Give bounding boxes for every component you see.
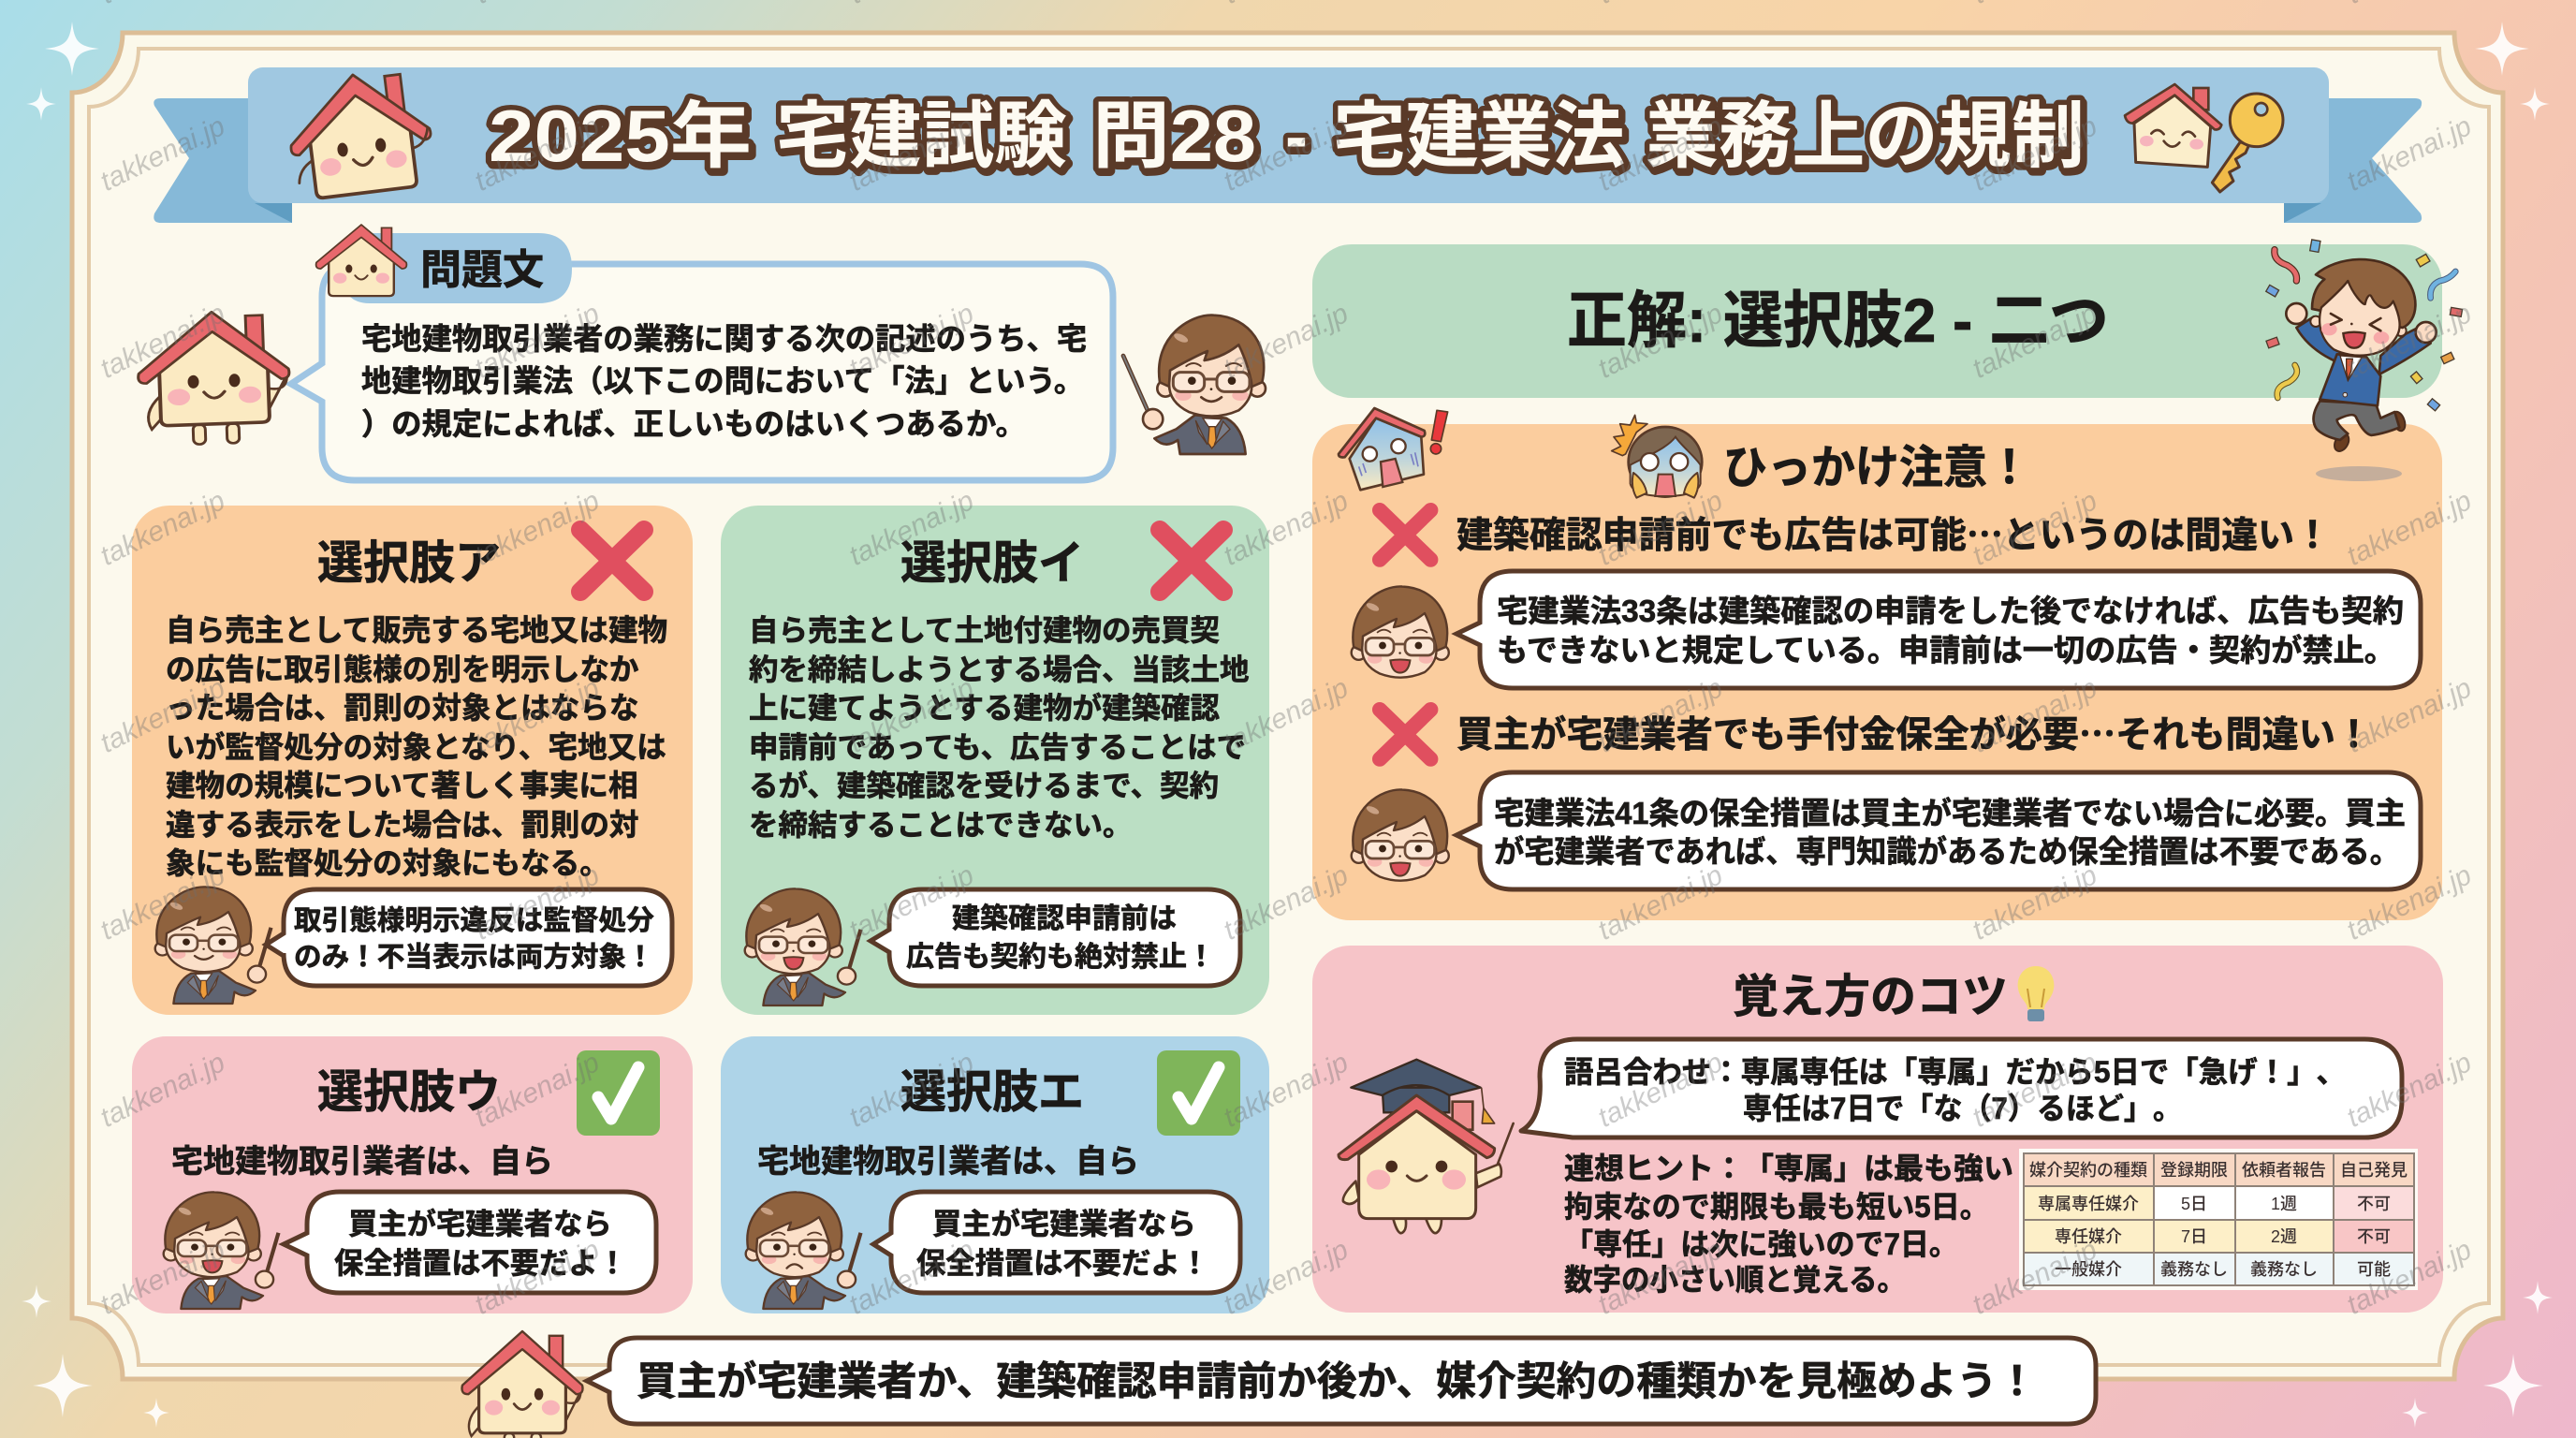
comparison table: 依頼者報告: [2242, 1161, 2326, 1180]
icon: house mascot: [136, 309, 291, 447]
comparison table: 可能: [2357, 1260, 2391, 1279]
icon: teacher: [746, 1192, 861, 1309]
bubble text: [906, 903, 1215, 973]
body text: 自ら売主として販売する宅地又は建物: [166, 613, 667, 647]
comparison table: 5日: [2181, 1195, 2207, 1213]
icon: scared house: [1339, 408, 1448, 490]
bubble text: 建築確認申請前は: [952, 903, 1177, 934]
watermarks: takkenai.jp: [95, 298, 230, 385]
body text: 象にも監督処分の対象にもなる。: [166, 846, 609, 880]
watermarks: takkenai.jp: [470, 298, 605, 385]
watermarks: takkenai.jp: [470, 1047, 605, 1134]
comparison table: 7日: [2181, 1227, 2207, 1246]
watermarks: takkenai.jp: [1219, 859, 1354, 946]
watermarks: takkenai.jp: [844, 1234, 979, 1321]
watermarks: takkenai.jp: [2342, 1047, 2477, 1134]
heading: 選択肢ウ: [317, 1067, 501, 1118]
watermarks: takkenai.jp: [470, 859, 605, 946]
icon: check: [577, 1050, 660, 1136]
comparison table: 登録期限: [2160, 1161, 2228, 1180]
watermarks: takkenai.jp: [1593, 298, 1728, 385]
ribbon tail: left: [154, 98, 292, 223]
tab: [341, 233, 572, 303]
watermarks: takkenai.jp: [470, 672, 605, 759]
body text: 自ら売主として土地付建物の売買契: [749, 613, 1220, 647]
comparison table: 一般媒介: [2055, 1260, 2122, 1279]
callout text: 買主が宅建業者か、建築確認申請前か後か、媒介契約の種類かを見極めよう！: [637, 1359, 2037, 1404]
comparison table: 媒介契約の種類: [2029, 1161, 2147, 1180]
bottom callout: [461, 1331, 2096, 1438]
body text: を締結することはできない。: [749, 808, 1133, 842]
icon: teacher face: [1352, 586, 1449, 678]
watermarks: takkenai.jp: [1219, 1234, 1354, 1321]
question text: 宅地建物取引業者の業務に関する次の記述のうち、宅: [361, 322, 1087, 356]
watermarks: takkenai.jp: [95, 672, 230, 759]
trap heading: 買主が宅建業者でも手付金保全が必要…それも間違い！: [1456, 706, 2372, 758]
body text: るが、建築確認を受けるまで、契約: [749, 769, 1219, 802]
icon: key: [2212, 94, 2283, 192]
comparison table: 義務なし: [2250, 1260, 2318, 1279]
body text: 申請前であっても、広告することはで: [749, 730, 1246, 764]
watermarks: takkenai.jp: [1593, 1047, 1728, 1134]
bubble text: 宅建業法41条の保全措置は買主が宅建業者でない場合に必要。買主: [1494, 796, 2406, 830]
body text: の広告に取引態様の別を明示しなか: [166, 653, 639, 686]
watermarks: takkenai.jp: [1968, 298, 2102, 385]
bubble text: [294, 905, 654, 973]
trap 2: [1352, 706, 2421, 889]
bubble text: 買主が宅建業者なら: [932, 1207, 1196, 1240]
comparison table: 義務なし: [2160, 1260, 2228, 1279]
panel: memorization tips: [1312, 946, 2443, 1313]
panel: option E: [721, 1036, 1269, 1313]
speech bubble: [873, 1192, 1240, 1293]
heading: 選択肢ア: [317, 538, 501, 589]
comparison table: 専任媒介: [2055, 1227, 2122, 1246]
speech bubble: [1456, 571, 2421, 688]
heading: title: 宅建試験: [776, 95, 1067, 177]
bubble text: が宅建業者であれば、専門知識があるため保全措置は不要である。: [1494, 834, 2400, 869]
bubble text: 広告も契約も絶対禁止！: [906, 942, 1215, 973]
icon: house with graduation cap: [1339, 1060, 1514, 1233]
icon: house mascot: [461, 1331, 583, 1438]
watermarks: takkenai.jp: [1968, 859, 2102, 946]
hint text: 「専任」は次に強いので7日。: [1564, 1227, 1958, 1261]
heading: title: 宅建業法: [1333, 95, 1625, 177]
bubble text: [1564, 1055, 2346, 1125]
comparison table: [2019, 1149, 2418, 1290]
watermarks: takkenai.jp: [844, 485, 979, 572]
icon: teacher: [164, 1192, 279, 1309]
speech bubble: [871, 889, 1240, 986]
icon: small house: [316, 225, 406, 296]
heading: title: 業務上の規制: [1646, 95, 2085, 177]
watermarks: takkenai.jp: [2342, 672, 2477, 759]
body text: 上に建てようとする建物が建築確認: [749, 691, 1221, 725]
watermarks: takkenai.jp: [844, 298, 979, 385]
panel: trap warning: [1312, 408, 2442, 920]
panel: option A: [132, 506, 693, 1015]
icon: cross: [580, 530, 644, 592]
speech bubble: [284, 1192, 656, 1293]
watermarks: takkenai.jp: [95, 110, 230, 198]
watermarks: takkenai.jp: [2342, 298, 2477, 385]
bubble text: 保全措置は不要だよ！: [334, 1247, 627, 1280]
watermarks: takkenai.jp: [1968, 485, 2102, 572]
watermarks: takkenai.jp: [2342, 485, 2477, 572]
watermarks: takkenai.jp: [844, 1047, 979, 1134]
watermarks: takkenai.jp: [95, 485, 230, 572]
icon: light bulb: [2018, 966, 2054, 1021]
bubble text: 買主が宅建業者なら: [348, 1207, 612, 1240]
panel: option I: [721, 506, 1269, 1015]
icon: house with happy eyes: [2125, 84, 2221, 167]
bubble text: 語呂合わせ：専属専任は「専属」だから5日で「急げ！」、: [1564, 1055, 2346, 1089]
answer text: 正解: 選択肢2 - 二つ: [1567, 286, 2109, 355]
watermarks: takkenai.jp: [844, 859, 979, 946]
icon: jumping boy with confetti: [2266, 240, 2463, 481]
watermarks: takkenai.jp: [470, 485, 605, 572]
body text: 約を締結しようとする場合、当該土地: [749, 653, 1250, 686]
bubble text: 宅建業法33条は建築確認の申請をした後でなければ、広告も契約: [1497, 594, 2404, 628]
body text: [166, 613, 667, 880]
icon: check: [1157, 1050, 1240, 1136]
icon: house mascot: [283, 66, 437, 201]
watermarks: takkenai.jp: [1593, 110, 1728, 198]
hint text: 拘束なので期限も最も短い5日。: [1564, 1190, 1989, 1224]
title banner: [154, 66, 2422, 223]
speech bubble: [291, 264, 1113, 480]
body text: った場合は、罰則の対象とはならな: [166, 691, 639, 725]
speech bubble: [266, 889, 672, 986]
icon: cross: [1380, 710, 1430, 759]
watermarks: takkenai.jp: [1593, 859, 1728, 946]
bubble text: [1497, 594, 2404, 668]
watermarks: takkenai.jp: [1219, 298, 1354, 385]
banner body: [248, 67, 2329, 203]
watermarks: takkenai.jp: [2342, 110, 2477, 198]
ribbon tail: right: [2284, 98, 2422, 223]
bubble text: 専任は7日で「な（7）るほど」。: [1743, 1092, 2182, 1125]
watermarks: takkenai.jp: [1219, 672, 1354, 759]
watermarks: takkenai.jp: [470, 1234, 605, 1321]
comparison table: 専属専任媒介: [2038, 1195, 2139, 1213]
heading: 選択肢イ: [900, 538, 1084, 589]
trap heading: 建築確認申請前でも広告は可能…というのは間違い！: [1456, 506, 2331, 559]
body text: [749, 613, 1250, 842]
icon: teacher: [1123, 315, 1266, 454]
hint text: 連想ヒント：「専属」は最も強い: [1564, 1152, 2013, 1185]
body text: 宅地建物取引業者は、自ら: [757, 1144, 1139, 1180]
heading: 覚え方のコツ: [1733, 972, 2008, 1022]
hint text: 数字の小さい順と覚える。: [1564, 1263, 1906, 1297]
watermarks: takkenai.jp: [1968, 1047, 2102, 1134]
bubble text: 保全措置は不要だよ！: [916, 1247, 1209, 1280]
panel: option U: [132, 1036, 693, 1313]
speech bubble: [1456, 772, 2421, 889]
panel: question: [136, 225, 1266, 480]
watermarks: takkenai.jp: [2342, 1234, 2477, 1321]
watermarks: takkenai.jp: [470, 110, 605, 198]
watermarks: takkenai.jp: [95, 859, 230, 946]
watermarks: takkenai.jp: [1219, 1047, 1354, 1134]
watermarks: takkenai.jp: [95, 1047, 230, 1134]
speech bubble: [587, 1338, 2096, 1424]
icon: teacher: [745, 888, 861, 1005]
heading: title: [489, 95, 2085, 177]
trap 1: [1352, 506, 2421, 688]
bubble text: のみ！不当表示は両方対象！: [294, 942, 654, 973]
icon: scared face: [1612, 415, 1702, 498]
body text: いが監督処分の対象となり、宅地又は: [166, 730, 666, 764]
tab label: 問題文: [420, 247, 544, 293]
body text: 違する表示をした場合は、罰則の対: [166, 808, 639, 842]
speech bubble: [1521, 1039, 2402, 1137]
bubble text: [334, 1207, 627, 1280]
heading: title: -: [1285, 95, 1308, 177]
icon: teacher: [155, 887, 271, 1004]
watermarks: takkenai.jp: [1968, 1234, 2102, 1321]
watermarks: takkenai.jp: [1593, 485, 1728, 572]
comparison table: 1週: [2271, 1195, 2297, 1213]
panel: answer: [1312, 244, 2442, 398]
heading: 選択肢エ: [900, 1067, 1084, 1118]
icon: cross: [1160, 530, 1223, 592]
watermarks: takkenai.jp: [1219, 485, 1354, 572]
watermarks: takkenai.jp: [95, 1234, 230, 1321]
watermarks: takkenai.jp: [2342, 859, 2477, 946]
icon: teacher face: [1352, 789, 1449, 881]
watermarks: takkenai.jp: [844, 110, 979, 198]
question text: [361, 322, 1087, 441]
comparison table: 自己発見: [2340, 1161, 2408, 1180]
watermarks: takkenai.jp: [1968, 110, 2102, 198]
watermarks: takkenai.jp: [1593, 672, 1728, 759]
body text: 宅地建物取引業者は、自ら: [171, 1144, 553, 1180]
comparison table: 不可: [2357, 1195, 2391, 1213]
watermarks: takkenai.jp: [1968, 672, 2102, 759]
hint text: [1564, 1152, 2013, 1297]
heading: title: 問28: [1092, 95, 1256, 177]
bubble text: もできないと規定している。申請前は一切の広告・契約が禁止。: [1497, 633, 2395, 668]
question text: ）の規定によれば、正しいものはいくつあるか。: [361, 407, 1026, 441]
heading: ひっかけ注意！: [1723, 443, 2031, 493]
bubble text: [916, 1207, 1209, 1280]
bubble text: 取引態様明示違反は監督処分: [294, 905, 654, 936]
bubble text: [1494, 796, 2406, 869]
confetti: [2275, 250, 2455, 398]
watermarks: takkenai.jp: [844, 672, 979, 759]
question text: 地建物取引業法（以下この問において「法」という。: [361, 364, 1084, 398]
comparison table: 不可: [2357, 1227, 2391, 1246]
comparison table: 2週: [2271, 1227, 2297, 1246]
icon: cross: [1380, 510, 1430, 560]
watermarks: takkenai.jp: [1219, 110, 1354, 198]
watermarks: takkenai.jp: [1593, 1234, 1728, 1321]
heading: title: 2025年: [489, 95, 752, 177]
body text: 建物の規模について著しく事実に相: [166, 769, 638, 802]
